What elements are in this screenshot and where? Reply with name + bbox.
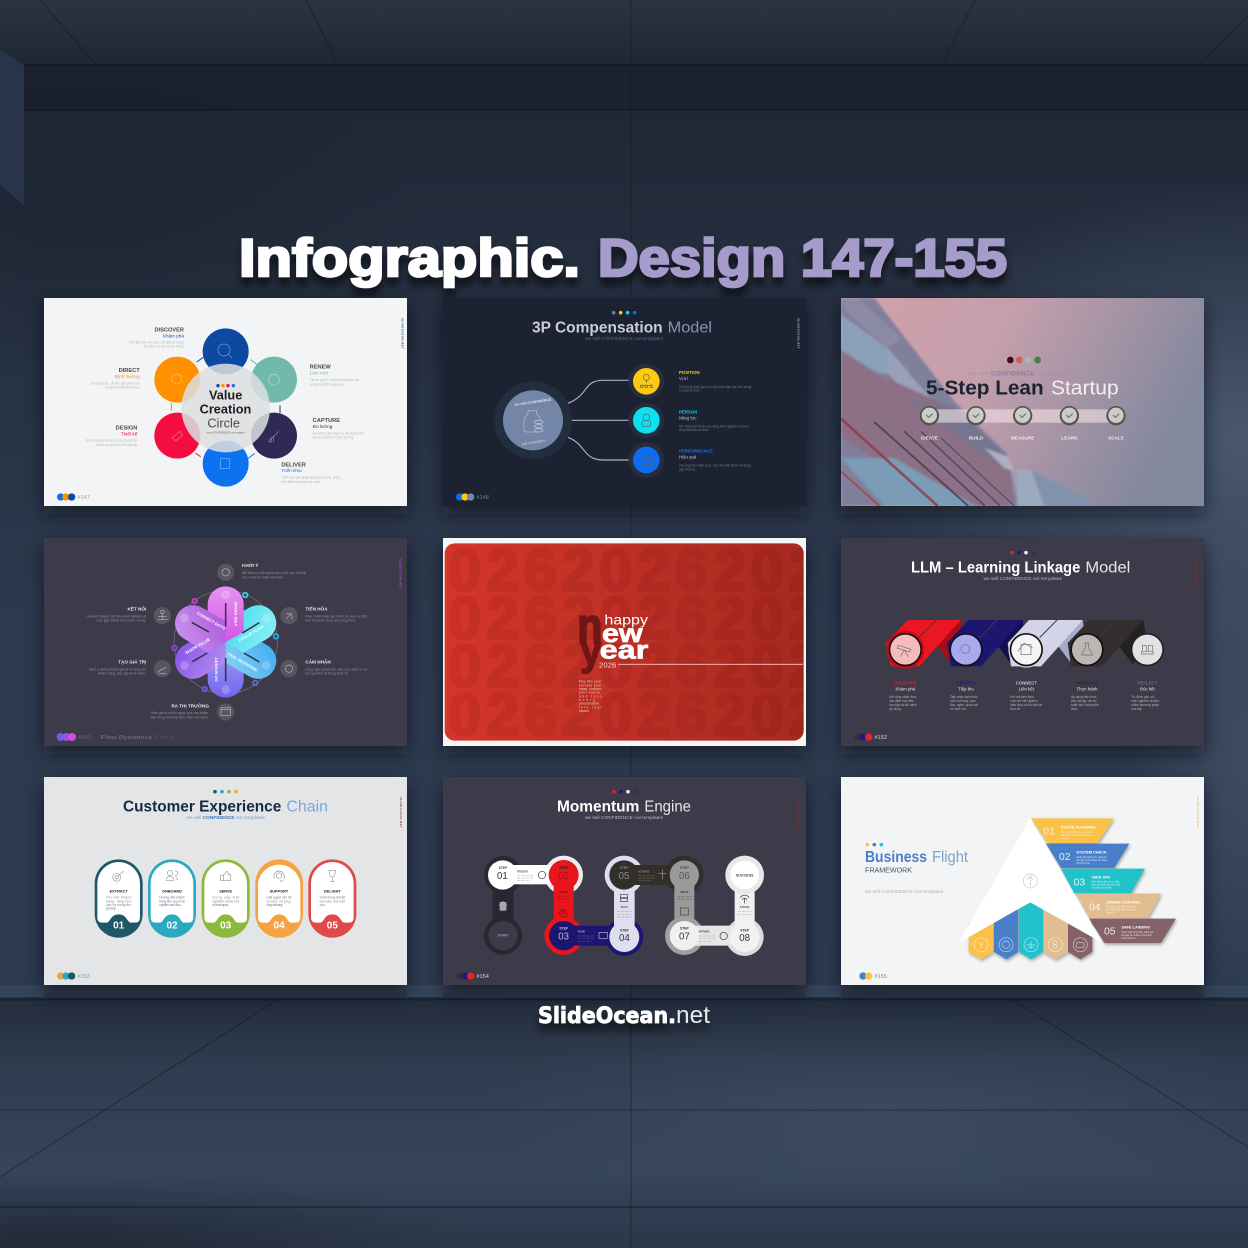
band text: Hoàn thành mục tiêu, đánh giá: [1121, 931, 1154, 934]
labels: học tập và bối cảnh: [889, 703, 917, 707]
labels: kết quả đến từ trong thực tế.: [305, 672, 349, 676]
step labels: [497, 866, 754, 944]
orbit ring and beads: [172, 590, 278, 694]
step labels: STEP: [680, 866, 689, 870]
capsule 04: 04: [273, 921, 285, 932]
panel: 152 LLM Learning Linkage Model: [841, 538, 1204, 746]
capsule 04: nhanh chóng,: [266, 899, 292, 903]
step labels: TRIGGER: [517, 871, 528, 873]
step labels: 02: [558, 871, 569, 882]
greeting text: impact.: [579, 709, 590, 713]
header: [123, 790, 328, 821]
labels: Khám phá: [895, 686, 916, 691]
centre circle: [181, 364, 270, 452]
labels: thực tế.: [1010, 707, 1021, 711]
step labels: STEP: [620, 866, 629, 870]
labels: vòng phát triển tiếp theo.: [310, 382, 345, 386]
labels: áp dụng.: [889, 707, 902, 711]
band text: trình tiếp theo.: [1121, 937, 1137, 940]
left heading: Business: [865, 849, 927, 866]
header: [557, 790, 691, 821]
outer icons: [154, 564, 298, 721]
panel: 150 Flow Dynamics Circle: [44, 538, 407, 746]
left heading: Flight: [932, 849, 969, 866]
header: Customer Experience: [123, 798, 281, 815]
main title: Design 147-155: [598, 229, 1007, 288]
central circle: [494, 381, 572, 459]
footer tag: [456, 972, 489, 980]
labels: Tái tạo giá trị, cải tiến giải pháp cho: [310, 378, 360, 382]
timeline bar: LEARN: [1061, 435, 1078, 440]
new year wordmark: [577, 598, 803, 674]
numeral pattern: [449, 548, 796, 737]
numeral pattern: 0262026202: [448, 681, 821, 748]
labels: KẾT NỐI: [127, 606, 146, 612]
timeline bar: MEASURE: [1011, 435, 1034, 440]
band text: SAFE LANDING: [1121, 926, 1150, 930]
step labels: OPTIMIZE: [699, 932, 710, 934]
labels: học tập.: [1131, 707, 1143, 711]
labels: Triển khai giải pháp đúng đối tượng, đúng: [281, 476, 340, 480]
labels: Áp dụng kiến thức: [1071, 695, 1097, 699]
new year wordmark: happy: [604, 612, 648, 628]
band text: đội ngũ và hệ thống vận hành: [1076, 859, 1108, 862]
band text: CRUISE CONTROL: [1106, 900, 1141, 904]
labels: TẠO GIÁ TRỊ: [118, 659, 146, 665]
labels: CAPTURE: [313, 418, 340, 424]
header: Engine: [644, 798, 691, 815]
footer tag: #152: [874, 735, 887, 741]
labels: RA THỊ TRƯỜNG: [171, 701, 209, 708]
labels: Kết nối kiến thức: [1010, 695, 1034, 699]
capsule 02: Hướng dẫn khách: [159, 895, 185, 900]
header: Startup: [1051, 377, 1119, 400]
labels: Đúc kết: [1140, 686, 1155, 691]
panel: 148 3P Compensation Model: [443, 298, 806, 506]
timeline bar: BUILD: [969, 435, 984, 440]
capsule 04: đúng nội dung.: [266, 903, 283, 907]
step labels: 06: [679, 871, 690, 882]
labels: Liên kết: [1019, 686, 1035, 691]
main title: [239, 229, 1007, 288]
labels: DIRECT: [119, 368, 140, 374]
header: we sell CONFIDENCE not templates: [186, 815, 265, 821]
panel: 153 Customer Experience Chain: [44, 777, 407, 985]
panel: 155 Business Flight Framework: [841, 777, 1204, 985]
header: [911, 551, 1130, 582]
header: 3P Compensation: [532, 319, 663, 336]
footer brand: net: [676, 1002, 710, 1029]
panel: 5-Step Lean Startup: [841, 298, 1204, 506]
centre circle: Creation: [200, 402, 251, 417]
header: [926, 357, 1119, 400]
labels: Tái tạo giá trị, cải tiến giải pháp cho: [90, 381, 140, 385]
band text: kết quả và chuẩn bị cho hành: [1121, 934, 1152, 937]
labels: RENEW: [310, 365, 331, 371]
step labels: 03: [558, 932, 569, 943]
flower petals: SPARK IDEA: [234, 602, 239, 626]
band text: Xác định đường bay, mục tiêu,: [1061, 831, 1093, 834]
numeral pattern: 0262026202: [448, 537, 821, 604]
step labels: 07: [679, 932, 690, 943]
step icons: [538, 870, 749, 940]
greeting text: elevate your: [579, 683, 601, 687]
header: we sell CONFIDENCE not templates: [585, 815, 664, 821]
central circle: we sell CONFIDENCE: [513, 398, 552, 407]
labels: Bắt đầu từ một ngoại cảm mới, vấn đề thật: [242, 570, 307, 575]
labels: Tự đánh giá, rút: [1131, 695, 1154, 699]
labels: Đưa giá trị tuyến ngoài qua sản phẩm,: [152, 711, 209, 715]
capsule 04: Giải quyết vấn đề: [266, 896, 292, 900]
header: Momentum: [557, 798, 639, 815]
new year wordmark: n: [577, 598, 602, 654]
labels: Tìm hiểu sâu nhu cầu, nỗi đau và mong: [129, 340, 184, 345]
ribbons: [886, 620, 1147, 666]
building photo: [841, 298, 1101, 506]
footer brand: SlideOcean.: [538, 1004, 676, 1029]
connector arrows: [171, 357, 280, 459]
flower petals: EVOLVE FLOW: [237, 624, 265, 643]
labels: DISCOVER: [154, 327, 184, 333]
labels: có chọn lọc.: [950, 707, 967, 711]
labels: bán hàng, thương hiệu hoặc vận hành.: [151, 715, 209, 719]
step labels: EXPAND: [740, 906, 750, 909]
capsule 01: hàng, tăng nhu: [106, 899, 132, 903]
step labels: 05: [619, 871, 629, 882]
central circle: not templates: [521, 438, 546, 447]
step labels: STEP: [620, 928, 629, 932]
labels: PERSON: [679, 409, 697, 414]
capsule 05: cực.: [320, 903, 326, 907]
centre circle: we sell CONFIDENCE not templates: [207, 431, 245, 434]
labels: ABSORB: [957, 680, 975, 685]
band text: Khởi động chiến lược, triển: [1091, 881, 1120, 884]
labels: Triển khai: [281, 467, 302, 473]
band text: Đánh giá nguồn lực, năng lực: [1076, 856, 1108, 859]
header: Chain: [286, 798, 328, 815]
band text: rõ ràng.: [1061, 837, 1069, 840]
flower petals: GO MARKET: [213, 657, 218, 682]
labels: trực giác thành bức tranh chung.: [97, 619, 146, 623]
capsule 03: [202, 859, 250, 938]
labels: vòng phát triển tiếp theo.: [105, 386, 140, 390]
labels: TIẾN HÓA: [305, 605, 328, 612]
connector curves: [568, 380, 630, 460]
path segments: [484, 856, 764, 956]
greeting text: presentation: [579, 702, 599, 706]
step labels: SUCCESS: [736, 874, 754, 878]
band text: một cách dứt khoát.: [1091, 887, 1112, 890]
footer tag: #150 ·: [78, 735, 94, 741]
bottom columns: [969, 902, 1092, 959]
left heading: [865, 843, 969, 895]
band text: 05: [1104, 927, 1116, 938]
capsule 03: nghiệm mượt mà: [212, 899, 239, 903]
vertical brand: SLIDEOCEAN.NET: [1196, 797, 1200, 828]
labels: PERFORMANCE: [679, 448, 713, 453]
band text: ROUTE PLANNING: [1061, 826, 1095, 830]
labels: góp thực tế.: [679, 467, 696, 471]
flower petals: FEEL RESPONSE: [227, 652, 259, 673]
labels: Tiếp thu: [958, 686, 974, 691]
labels: Thưởng theo hiệu suất, mục tiêu đạt được và đóng: [679, 464, 751, 468]
greeting text: into real: [579, 705, 602, 709]
labels: Hiệu quả: [679, 455, 697, 460]
labels: chỉnh phương pháp: [1131, 703, 1159, 707]
labels: DELIVER: [281, 462, 306, 468]
capsule 01: EXTRACT: [110, 890, 128, 894]
step labels: STEP: [680, 927, 689, 931]
main title: Infographic.: [239, 229, 580, 288]
capsule 01: 01: [113, 921, 125, 932]
vertical brand: SLIDEOCEAN.NET: [399, 558, 403, 589]
labels: CONNECT: [1016, 680, 1037, 685]
labels: Thực hành: [1077, 686, 1098, 691]
labels: Mở rộng nhận thức,: [889, 695, 917, 699]
labels: doanh và phản hồi thị trường.: [313, 436, 354, 440]
labels: Thiết kế: [121, 431, 138, 436]
labels: mới có thống, qua: [950, 699, 976, 703]
labels: [679, 370, 752, 471]
header: we sell CONFIDENCE not templates: [585, 336, 664, 342]
capsule 05: 05: [327, 921, 338, 932]
panel shadows: [44, 306, 1204, 993]
header: 5-Step Lean: [926, 377, 1044, 400]
new year wordmark: y: [580, 627, 601, 674]
footer tag: [57, 972, 90, 980]
header: Model: [1085, 559, 1130, 576]
timeline bar: IDEATE: [921, 435, 938, 440]
footer tag: Flow Dynamics: [101, 735, 152, 741]
step labels: 08: [739, 933, 750, 944]
footer tag: [859, 972, 887, 980]
capsule 01: cầu và mong đợi: [106, 903, 132, 907]
white arrow: [958, 818, 1103, 943]
labels: PRACTICE: [1076, 680, 1098, 685]
band text: [1043, 826, 1154, 940]
labels: DISCOVER: [894, 680, 918, 685]
band text: độ, điều chỉnh linh hoạt theo: [1106, 909, 1136, 912]
timeline bar: SCALE: [1108, 435, 1124, 440]
footer tag: #148: [476, 495, 489, 501]
capsule 02: ONBOARD: [162, 890, 182, 894]
labels: xác định mục tiêu: [889, 699, 914, 703]
numeral pattern: 0262026202: [448, 585, 821, 652]
panel: 154 Momentum Engine: [443, 777, 806, 985]
step labels: STEP: [559, 866, 569, 870]
capsule 02: hàng làm quen trải: [159, 899, 185, 903]
greeting text: [579, 680, 602, 713]
petal circles: [154, 328, 297, 487]
footer tag: [854, 733, 887, 741]
footer tag: #153: [77, 974, 90, 980]
left heading: we sell CONFIDENCE not templates: [865, 889, 944, 895]
panel: 147 Value Creation Circle: [44, 298, 407, 506]
stepped bands: [1031, 818, 1176, 943]
labels: Điều chỉnh nhịp vận hành, tư duy và định: [305, 614, 367, 618]
labels: KHỞI Ý: [242, 562, 259, 568]
header: Model: [668, 319, 712, 336]
step labels: STEP: [499, 866, 508, 870]
header: [532, 311, 712, 342]
capsule 02: [148, 859, 196, 938]
flower petals: CONNECT DOTS: [196, 611, 226, 631]
labels: Tiếp nhận kiến thức: [950, 695, 978, 699]
header: we sell CONFIDENCE not templates: [968, 371, 1077, 378]
labels: Lắng nghe phản hồi, cảm xúc, hành vi và: [305, 666, 367, 671]
step labels: STEP: [740, 928, 750, 932]
band text: khai các hành động ban đầu: [1091, 884, 1121, 887]
step labels: FOCUS: [560, 892, 568, 894]
labels: khách hàng, đội ngũ và tổ chức.: [98, 672, 146, 676]
labels: Trả lương theo giá trị và độ phức tạp của vị trí trong: [679, 385, 752, 389]
band text: 02: [1059, 852, 1071, 863]
capsule 01: Thu hút khách: [106, 896, 132, 900]
band text: Duy trì tốc độ, kiểm soát tiến: [1106, 906, 1137, 909]
step nodes: [629, 364, 664, 478]
vertical brand: SLIDEOCEAN.NET: [1194, 558, 1198, 589]
band text: 01: [1043, 827, 1055, 838]
labels: thực.: [1071, 707, 1078, 711]
new year wordmark: ew: [602, 618, 644, 648]
labels: độ phát triển cá nhân.: [679, 428, 710, 432]
labels: Định hướng: [115, 374, 140, 379]
labels: Vị trí: [679, 376, 689, 381]
capsule 05: [308, 859, 356, 938]
labels: Làm mới: [310, 371, 328, 376]
greeting text: ideas, sharpen: [579, 687, 602, 691]
labels: Năng lực: [679, 415, 697, 420]
step labels: GUIDE: [578, 932, 585, 934]
centre circle: Circle: [207, 416, 240, 431]
labels: REFLECT: [1137, 680, 1158, 685]
capsule 03: và nhất quán.: [212, 903, 229, 907]
band text: 04: [1089, 902, 1101, 913]
step labels: TRACK: [680, 891, 689, 894]
capsule 03: Cung cấp trải: [212, 896, 239, 900]
capsule 02: 02: [166, 921, 178, 932]
labels: Khám phá: [163, 333, 184, 338]
labels: kiến thức cũ và vấn đề: [1010, 703, 1042, 707]
labels: CẢM NHẬN: [305, 659, 331, 665]
greeting text: May this year: [579, 680, 601, 684]
labels: đọc, nghe, quan sát: [950, 703, 978, 707]
labels: Ghi nhận kiến thức, kỹ năng, kinh nghiệm và mức: [679, 424, 749, 428]
step labels: START: [498, 933, 508, 937]
labels: doanh và phản hồi thị trường.: [96, 443, 137, 447]
flower petals: SHAPE VALUE: [184, 637, 211, 655]
centre circle: Value: [209, 387, 242, 402]
step labels: ACTIVATE: [638, 870, 650, 873]
band text: thực tế.: [1106, 912, 1115, 915]
step labels: BUILD: [621, 907, 628, 909]
greeting text: every: [579, 698, 595, 702]
step labels: 04: [619, 933, 630, 944]
header: LLM – Learning Linkage: [911, 559, 1080, 576]
numeral pattern: 0262026202: [448, 633, 821, 700]
labels: hoặc tình huống đời: [1071, 703, 1099, 707]
footer tag: #155: [874, 974, 887, 980]
capsule 05: DELIGHT: [324, 890, 341, 894]
labels: Đo lường giá trị tạo ra, tác động kinh: [313, 431, 364, 435]
labels: kinh nghiệm và điều: [1131, 699, 1160, 703]
vertical brand: SLIDEOCEAN.NET: [401, 318, 405, 349]
vertical brand: SLIDEOCEAN.NET: [796, 318, 800, 349]
band text: trước khi bay.: [1076, 862, 1091, 865]
footer tag: Circle: [155, 735, 174, 741]
capsule 04: [255, 859, 303, 938]
labels: Biến ý tưởng thành giá trị rõ ràng cho: [89, 667, 146, 671]
timeline bar: [920, 406, 1126, 440]
labels: cơ cấu tổ chức.: [679, 389, 701, 393]
circles with icons: [886, 631, 1164, 669]
greeting text: and turn: [579, 694, 602, 698]
band text: TAKE OFF: [1091, 875, 1111, 879]
labels: và cơ hội từ nhiệt xuất hiện.: [242, 575, 284, 579]
labels: POSITION: [679, 370, 700, 375]
step labels: 01: [497, 871, 508, 882]
labels: [889, 680, 1160, 711]
labels: Đo lường giá trị tạo ra, tác động kinh: [86, 439, 138, 443]
band text: 03: [1074, 877, 1085, 888]
capsule 02: nghiệm ban đầu.: [159, 903, 181, 907]
vertical brand: SLIDEOCEAN.NET: [796, 797, 800, 828]
new year wordmark: 2026: [599, 660, 616, 669]
footer tag: [456, 493, 489, 501]
capsule 03: 03: [220, 921, 232, 932]
greeting text: your vision,: [579, 691, 601, 695]
labels: mới với trải nghiệm,: [1010, 699, 1038, 703]
labels: đợi thực sự của khách hàng.: [144, 345, 184, 349]
capsule 01: [95, 859, 143, 938]
flower petals: [168, 586, 283, 698]
labels: vào bài tập, dự án: [1071, 699, 1097, 703]
footer tag: #154: [476, 974, 489, 980]
capsule 01: phù hợp.: [106, 907, 117, 911]
column icons: [974, 938, 1087, 952]
capsule 05: Vượt mong đợi để: [320, 896, 345, 900]
left heading: FRAMEWORK: [865, 865, 912, 874]
capsule 03: SERVE: [219, 890, 233, 894]
labels: [86, 562, 367, 719]
labels: Liên kết insight, dữ liệu, kinh nghiệm và: [86, 614, 147, 618]
labels: [86, 327, 364, 484]
footer tag: [57, 733, 174, 741]
labels: bên để bước sang vòng tiếp theo.: [305, 619, 356, 623]
vertical brand: SLIDEOCEAN.NET: [399, 797, 403, 828]
capsule 04: SUPPORT: [270, 890, 289, 894]
band text: SYSTEM CHECK: [1076, 851, 1107, 855]
labels: Đo lường: [313, 424, 333, 429]
new year wordmark: ear: [600, 635, 648, 665]
capsule 05: tạo cảm xúc tích: [320, 899, 345, 903]
band text: điểm đến và lộ trình chiến lược: [1061, 834, 1094, 837]
header: we sell CONFIDENCE not templates: [983, 576, 1062, 582]
step labels: STEP: [559, 927, 569, 931]
panel: happy new year 2026: [443, 537, 821, 748]
footer tag: #147: [77, 495, 90, 501]
labels: thời điểm và kênh hiệu quả.: [281, 480, 320, 484]
labels: DESIGN: [116, 425, 137, 431]
footer tag: [57, 493, 90, 501]
